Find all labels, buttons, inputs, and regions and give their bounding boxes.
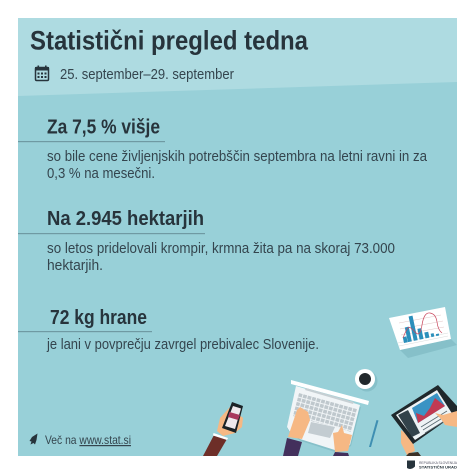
text: potatoes [47,241,395,274]
heading: prices: Za 7,5 % višje [47,116,160,138]
left sleeve [283,438,302,456]
illustration: phone in hand [203,402,243,456]
logo text [419,460,457,470]
icon: coffee cup [355,369,378,392]
text: prices: 0,3 % na mesečni. [47,166,155,182]
text: potatoes: so letos pridelovali krompir, krmna žita pa na skoraj 73.000 [47,241,395,257]
right sleeve [333,452,349,456]
logo: statistical office [407,460,457,470]
icon: calendar [35,66,49,80]
link: more info: Več na www.stat.si [45,433,131,447]
heading: potatoes: Na 2.945 hektarjih [47,208,204,230]
left hand [401,430,415,455]
icon: paper chart [389,307,457,358]
left hand [288,407,310,439]
logo text: STATISTIČNI URAD [419,464,457,470]
right hand [435,411,457,427]
icon: pencil [369,420,378,447]
section: food waste [18,307,319,353]
right hand [333,425,352,452]
illustration: laptop with hands [283,380,369,456]
text: food waste: je lani v povprečju zavrgel prebivalec Slovenije. [46,337,319,353]
section: potatoes [18,208,395,274]
title: Statistični pregled tedna [30,26,309,56]
icon: shield [407,460,415,469]
text: potatoes: hektarjih. [47,258,103,274]
date range: 25. september–29. september [60,67,234,83]
heading: food waste: 72 kg hrane [50,307,147,329]
illustration: tablet in hands [391,385,457,456]
section: food prices [18,116,428,182]
logo text: REPUBLIKA SLOVENIJA [419,460,457,465]
panel: header band [18,18,457,96]
text: prices: so bile cene življenjskih potrebščin septembra na letni ravni in za [47,149,428,165]
text: prices [47,149,428,182]
icon: rocket [30,434,38,444]
